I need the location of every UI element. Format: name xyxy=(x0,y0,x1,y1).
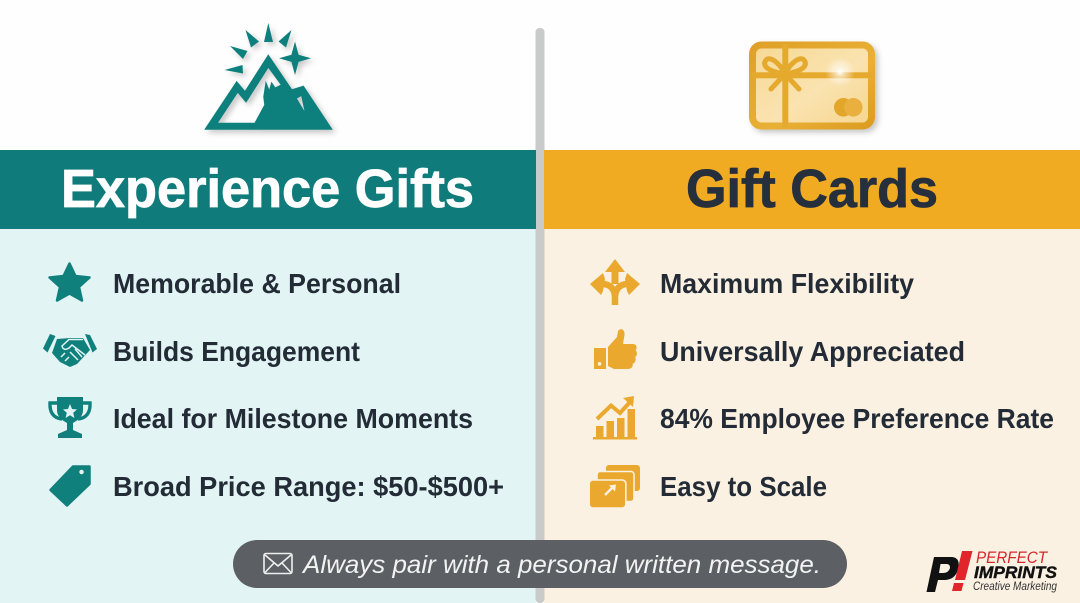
text: ideal for milestone moments: Ideal for Milestone Moments xyxy=(113,403,473,434)
logo mark P xyxy=(926,557,959,592)
text: maximum flexibility: Maximum Flexibility xyxy=(660,268,915,299)
logo text xyxy=(973,548,1058,593)
icon: star xyxy=(50,264,90,300)
icon: handshake xyxy=(43,334,97,367)
text: builds engagement: Builds Engagement xyxy=(113,336,360,367)
icon: price tag xyxy=(50,466,90,506)
list: gift cards benefits xyxy=(589,259,1054,508)
text: easy to scale: Easy to Scale xyxy=(660,471,827,502)
logo text: PERFECT xyxy=(976,548,1048,567)
icon: thumbs up xyxy=(594,329,637,369)
header: experience gifts xyxy=(0,150,536,229)
icon: gift card xyxy=(752,44,872,127)
center divider xyxy=(536,28,544,603)
callout: personal message pill xyxy=(233,540,847,588)
icon: envelope xyxy=(264,554,292,574)
icon: branching arrows xyxy=(590,259,640,305)
panel: experience gifts body xyxy=(0,229,536,603)
text: memorable and personal: Memorable & Personal xyxy=(113,268,401,299)
logo text: IMPRINTS xyxy=(974,563,1058,582)
text: callout message: Always pair with a personal written message. xyxy=(301,551,821,579)
header: experience gifts: Experience Gifts xyxy=(61,159,474,219)
panel: gift cards body xyxy=(544,229,1080,603)
icon: mountain with sparkles xyxy=(206,23,332,129)
logo mark exclamation xyxy=(952,551,972,591)
header: gift cards: Gift Cards xyxy=(686,159,938,219)
logo text: Creative Marketing xyxy=(973,581,1058,593)
header: gift cards xyxy=(544,150,1080,229)
logo: perfect imprints xyxy=(926,548,1058,593)
text: employee preference rate: 84% Employee Preference Rate xyxy=(660,403,1054,434)
list: experience gifts benefits xyxy=(43,264,504,506)
icon: growth chart xyxy=(593,396,637,440)
icon: stacked cards xyxy=(589,465,640,508)
icon: trophy xyxy=(50,397,90,438)
text: broad price range: Broad Price Range: $50-$500+ xyxy=(113,471,504,502)
text: universally appreciated: Universally Appreciated xyxy=(660,336,965,367)
